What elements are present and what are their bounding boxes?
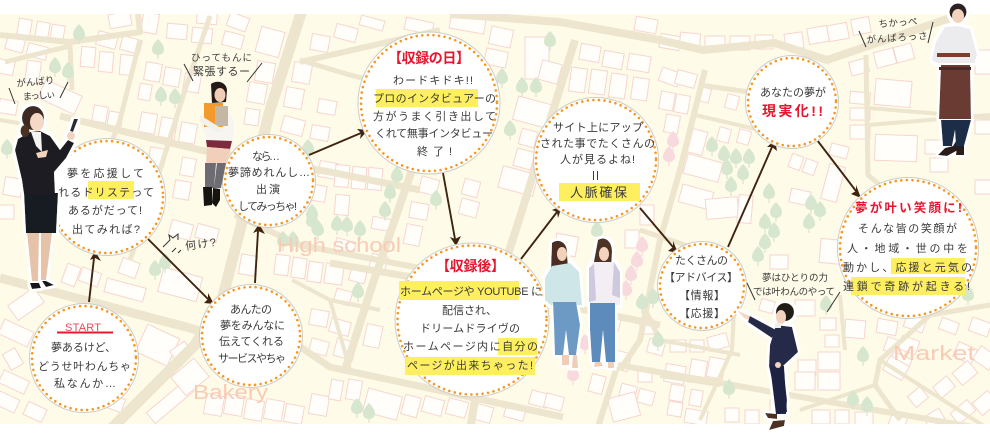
arrow: circle 2 to circle 3: [148, 239, 214, 304]
speech: ひってもんに緊張するー: ひってもんに: [191, 53, 252, 64]
person: nervous girl with folder: [200, 82, 234, 207]
start text: どうせ叶わんちゃ: [38, 360, 131, 373]
heading: 収録の日: 【収録の日】: [388, 50, 470, 66]
text: 収録の日 circle: くれて無事インタビュー: [375, 126, 493, 140]
text: 夢が叶い笑顔に circle: そんな皆の笑顔が: [858, 221, 957, 235]
speech: がんばりまっしぃ: まっしぃ: [22, 89, 56, 103]
highlight: 人脈確保: [559, 183, 640, 201]
circle: 収録の日: [358, 32, 500, 174]
speech: 夢はひとりの力では叶わんのやって: [747, 272, 840, 312]
circle: 現実化: [746, 56, 838, 148]
text: 収録後 circle: ページが出来ちゃった!: [407, 358, 533, 372]
start text: 夢あるけど、: [51, 341, 116, 354]
person: waiter with tray: [932, 4, 977, 156]
text: あんたの circle: 伝えてくれる: [219, 335, 284, 348]
circle: あんたの: [200, 284, 302, 388]
text: たくさんの circle: 【アドバイス】: [664, 271, 738, 284]
circle: サイト上: [534, 98, 658, 222]
arrow: circle 3 to circle 4: [253, 224, 265, 283]
text: 現実化 circle: 現実化!!: [762, 103, 823, 119]
text: 夢が叶い笑顔に circle: 夢が叶い笑顔に!: [855, 200, 962, 215]
text: なら circle: してみっちゃ!: [238, 200, 297, 213]
woman left: [545, 241, 582, 368]
text: 収録後 circle: 配信され、: [442, 303, 497, 317]
text: 現実化 circle: [760, 85, 826, 119]
highlight: 応援と元気: [891, 258, 965, 274]
speech: ひってもんに緊張するー: [184, 53, 262, 82]
person: two women in jeans: [545, 238, 620, 368]
text: たくさんの circle: 【応援】: [679, 306, 725, 320]
text: ドリステ circle: あるがだって!: [68, 203, 142, 217]
label: Bakery: Bakery: [193, 382, 268, 404]
speech: ちかっぺがんばろっさ: ちかっぺ: [878, 16, 918, 30]
speech: がんばりまっしぃ: [9, 74, 68, 104]
text: なら circle: 夢諦めれんし…: [228, 166, 310, 179]
circle: たくさんの: [658, 242, 746, 330]
highlight: 連鎖で奇跡が起きる: [851, 277, 965, 295]
text: 収録の日 circle: [373, 74, 496, 158]
text: 夢が叶い笑顔に circle: 連鎖で奇跡が起きる!: [843, 279, 970, 293]
woman right: [589, 238, 620, 368]
text: サイト上 circle: された事でたくさんの: [540, 137, 655, 150]
text: ドリステ circle: 夢を応援して: [67, 166, 144, 180]
start text: [38, 341, 131, 390]
text: サイト上 circle: 人脈確保: [570, 185, 627, 200]
text: サイト上 circle: [540, 121, 655, 200]
highlight: 自分の: [498, 338, 537, 355]
text: たくさんの circle: たくさんの: [675, 254, 728, 267]
text: 収録の日 circle: 方がうまく引き出して: [373, 109, 496, 123]
circle: ドリステ: [48, 138, 166, 256]
person: man in suit pointing: [738, 303, 798, 430]
arrow: circle 5 to circle 6: [443, 173, 461, 246]
text: ドリステ circle: 出てみれば?: [72, 223, 140, 236]
speech: ひってもんに緊張するー: 緊張するー: [193, 65, 250, 78]
text: 収録後 circle: [400, 285, 542, 372]
text: 収録後 circle: ホームページや YOUTUBE に: [400, 285, 542, 298]
person: announcer with microphone: [15, 106, 78, 289]
text: 夢が叶い笑顔に circle: 動かし、応援と元気の: [843, 260, 972, 274]
text: サイト上 circle: 人が見るよね!: [560, 152, 635, 166]
arrow: circle 9 to circle 10: [817, 140, 861, 198]
circle: 収録後: [395, 243, 549, 397]
highlight: ページが出来ちゃった: [405, 357, 535, 375]
start text: 私なんか…: [54, 377, 116, 390]
label: High school: High school: [277, 235, 401, 257]
arrow: circle 8 to circle 9: [728, 140, 777, 247]
speech: 何け? with burst: 何け?: [184, 236, 217, 253]
circle: 夢が叶い笑顔に: [838, 178, 978, 318]
circle: なら: [222, 134, 316, 228]
arrow: circle 6 to circle 7: [521, 206, 562, 259]
heading: 収録後: 【収録後】: [436, 258, 505, 274]
highlight: プロのインタビュアー: [376, 89, 478, 107]
text: 収録の日 circle: わードキドキ!!: [393, 74, 473, 87]
text: たくさんの circle: [664, 254, 738, 320]
text: 現実化 circle: あなたの夢が: [760, 85, 826, 99]
speech: 夢はひとりの力では叶わんのやって: では叶わんのやって: [753, 287, 835, 298]
speech: 夢はひとりの力では叶わんのやって: 夢はひとりの力: [762, 272, 828, 284]
arrow: circle 4 to circle 5: [309, 129, 368, 155]
speech: がんばりまっしぃ: がんばり: [16, 74, 55, 90]
highlight: ホームページや YOUTUBE: [399, 281, 519, 300]
text: 収録の日 circle: プロのインタビュアーの: [373, 92, 496, 105]
speech: ちかっぺがんばろっさ: がんばろっさ: [866, 30, 928, 46]
text: あんたの circle: 夢をみんなに: [220, 319, 285, 332]
circle: START: [30, 304, 138, 412]
arrow: circle 7 to circle 8: [640, 208, 678, 253]
text: ドリステ circle: れるドリステって: [58, 186, 154, 199]
arrow: start to circle 2: [89, 251, 101, 302]
text: たくさんの circle: 【情報】: [679, 289, 725, 302]
text: 夢が叶い笑顔に circle: 人・地域・世の中を: [847, 242, 968, 255]
text: 収録後 circle: ホームページ内に自分の: [403, 339, 538, 353]
START label: START: [65, 322, 101, 334]
text: サイト上 circle: サイト上にアップ: [553, 121, 643, 134]
highlight: ドリステ: [88, 181, 134, 199]
text: あんたの circle: あんたの: [230, 303, 272, 316]
text: あんたの circle: [218, 303, 286, 365]
speech: 何け? with burst: [163, 234, 217, 253]
label: Market: Market: [893, 343, 976, 365]
text: あんたの circle: サービスやちゃ: [218, 352, 286, 365]
text: なら circle: なら…: [252, 150, 280, 163]
text: 収録後 circle: ドリームドライヴの: [420, 321, 520, 335]
text: なら circle: 出演: [256, 183, 280, 196]
text: 収録の日 circle: 終了!: [417, 145, 452, 158]
map pink trees: [567, 131, 679, 385]
text: なら circle: [228, 150, 310, 213]
speech: ちかっぺがんばろっさ: [859, 16, 933, 47]
text: ドリステ circle: [58, 166, 154, 236]
text: 夢が叶い笑顔に circle: [843, 200, 972, 293]
